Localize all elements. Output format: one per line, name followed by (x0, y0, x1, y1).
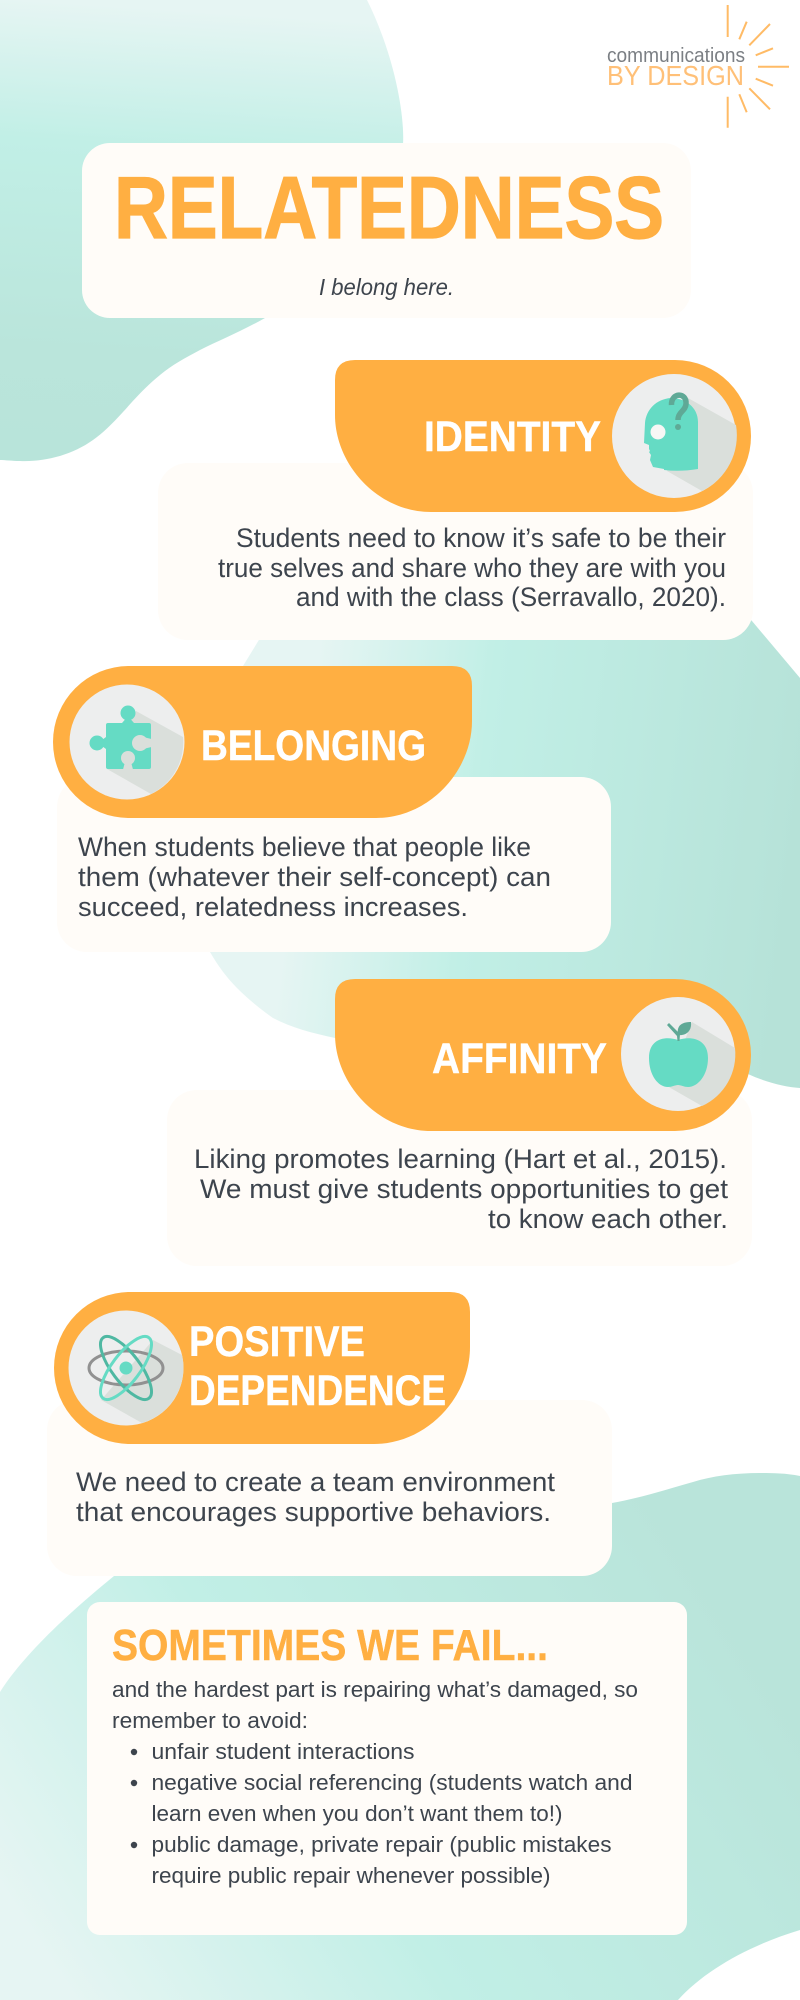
panel: belonging (53, 666, 611, 952)
icon: atom (68, 1310, 184, 1426)
fail intro text: remember to avoid: (112, 1708, 308, 1733)
affinity text card: to know each other. (488, 1204, 728, 1234)
affinity text card (167, 1090, 752, 1266)
positive dependence text card: that encourages supportive behaviors. (76, 1497, 551, 1527)
affinity text card: Liking promotes learning (Hart et al., 2015). (194, 1144, 727, 1174)
identity pill (335, 360, 751, 512)
fail bullet list: learn even when you don’t want them to!) (152, 1801, 562, 1826)
affinity heading: AFFINITY (432, 1035, 607, 1083)
logo wordmark top: communications (607, 45, 745, 67)
affinity pill (335, 979, 751, 1131)
affinity text card: We must give students opportunities to get (200, 1174, 729, 1204)
title: RELATEDNESS (114, 158, 664, 257)
fail bullet list (131, 1739, 633, 1888)
logo wordmark bottom: BY DESIGN (607, 60, 744, 91)
icon: puzzle piece (70, 684, 184, 800)
fail bullet list: negative social referencing (students watch and (152, 1770, 632, 1795)
belonging text card: them (whatever their self-concept) can (78, 862, 551, 892)
positive dependence text card: We need to create a team environment (76, 1467, 556, 1497)
background blob: top left (0, 0, 403, 461)
positive dependence text card (47, 1400, 612, 1576)
fail bullet list: require public repair whenever possible) (152, 1863, 550, 1888)
identity text card (158, 463, 753, 640)
logo rays (728, 5, 789, 128)
subtitle: I belong here. (319, 274, 454, 300)
identity text card: and with the class (Serravallo, 2020). (296, 582, 726, 612)
fail bullet list: public damage, private repair (public mistakes (152, 1832, 612, 1857)
identity text card: true selves and share who they are with you (218, 553, 726, 583)
belonging pill (53, 666, 472, 818)
identity text card: Students need to know it’s safe to be their (236, 523, 726, 553)
icon: apple (621, 997, 735, 1111)
background blob: bottom (0, 1473, 800, 2000)
logo: communications by design (607, 5, 789, 128)
belonging text card: succeed, relatedness increases. (78, 892, 468, 922)
belonging text card: When students believe that people like (78, 832, 531, 862)
panel: affinity (167, 979, 752, 1266)
panel: positive dependence (47, 1292, 612, 1576)
fail heading: SOMETIMES WE FAIL... (112, 1621, 548, 1670)
icon: head with question mark (612, 374, 737, 498)
panel: sometimes we fail (87, 1602, 687, 1935)
positive dependence pill (54, 1292, 470, 1444)
belonging heading: BELONGING (201, 722, 426, 770)
title panel (82, 143, 691, 318)
panel: identity (158, 360, 753, 640)
belonging text card (57, 777, 611, 952)
positive dependence heading: POSITIVE (189, 1318, 365, 1366)
positive dependence heading (189, 1318, 446, 1415)
fail intro text: and the hardest part is repairing what’s damaged, so (112, 1677, 638, 1702)
positive dependence heading: DEPENDENCE (189, 1367, 446, 1415)
background blob: middle right (205, 598, 800, 1088)
fail intro text (112, 1677, 638, 1733)
fail bullet list: unfair student interactions (152, 1739, 414, 1764)
identity heading: IDENTITY (424, 413, 601, 461)
